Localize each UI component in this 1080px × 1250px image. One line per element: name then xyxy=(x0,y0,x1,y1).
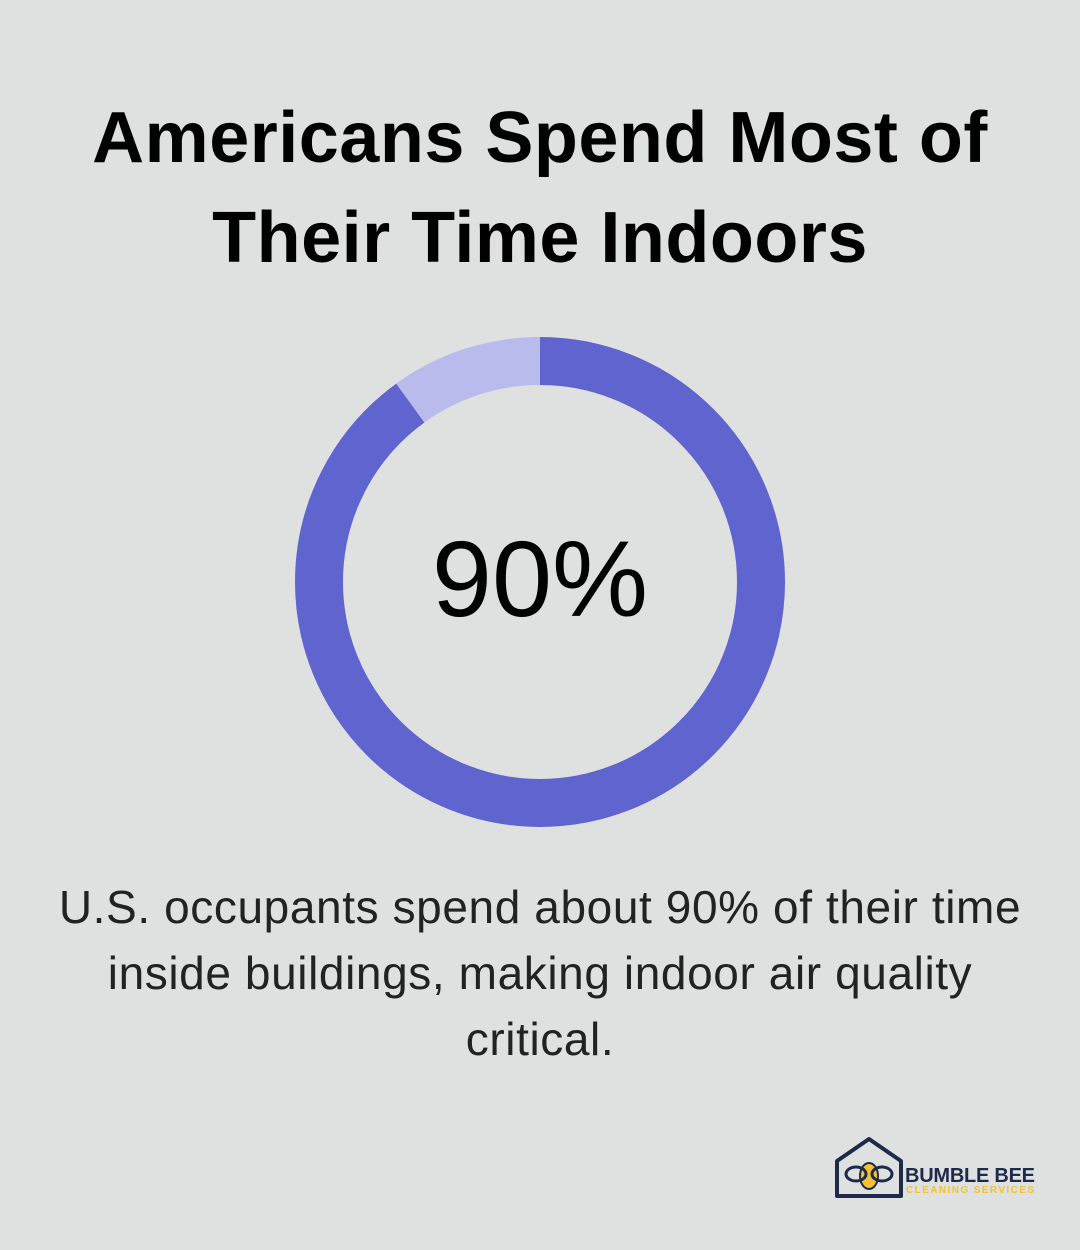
description xyxy=(59,881,1021,1065)
description: U.S. occupants spend about 90% of their time xyxy=(59,881,1021,933)
donut chart: 90% xyxy=(432,518,648,639)
description: inside buildings, making indoor air quality xyxy=(108,947,972,999)
title: Americans Spend Most of xyxy=(92,98,988,178)
title: Their Time Indoors xyxy=(212,198,868,278)
logo xyxy=(835,1137,1035,1198)
logo: BUMBLE BEE xyxy=(905,1165,1035,1187)
title xyxy=(92,98,988,278)
logo: CLEANING SERVICES xyxy=(906,1185,1034,1196)
description: critical. xyxy=(466,1013,614,1065)
